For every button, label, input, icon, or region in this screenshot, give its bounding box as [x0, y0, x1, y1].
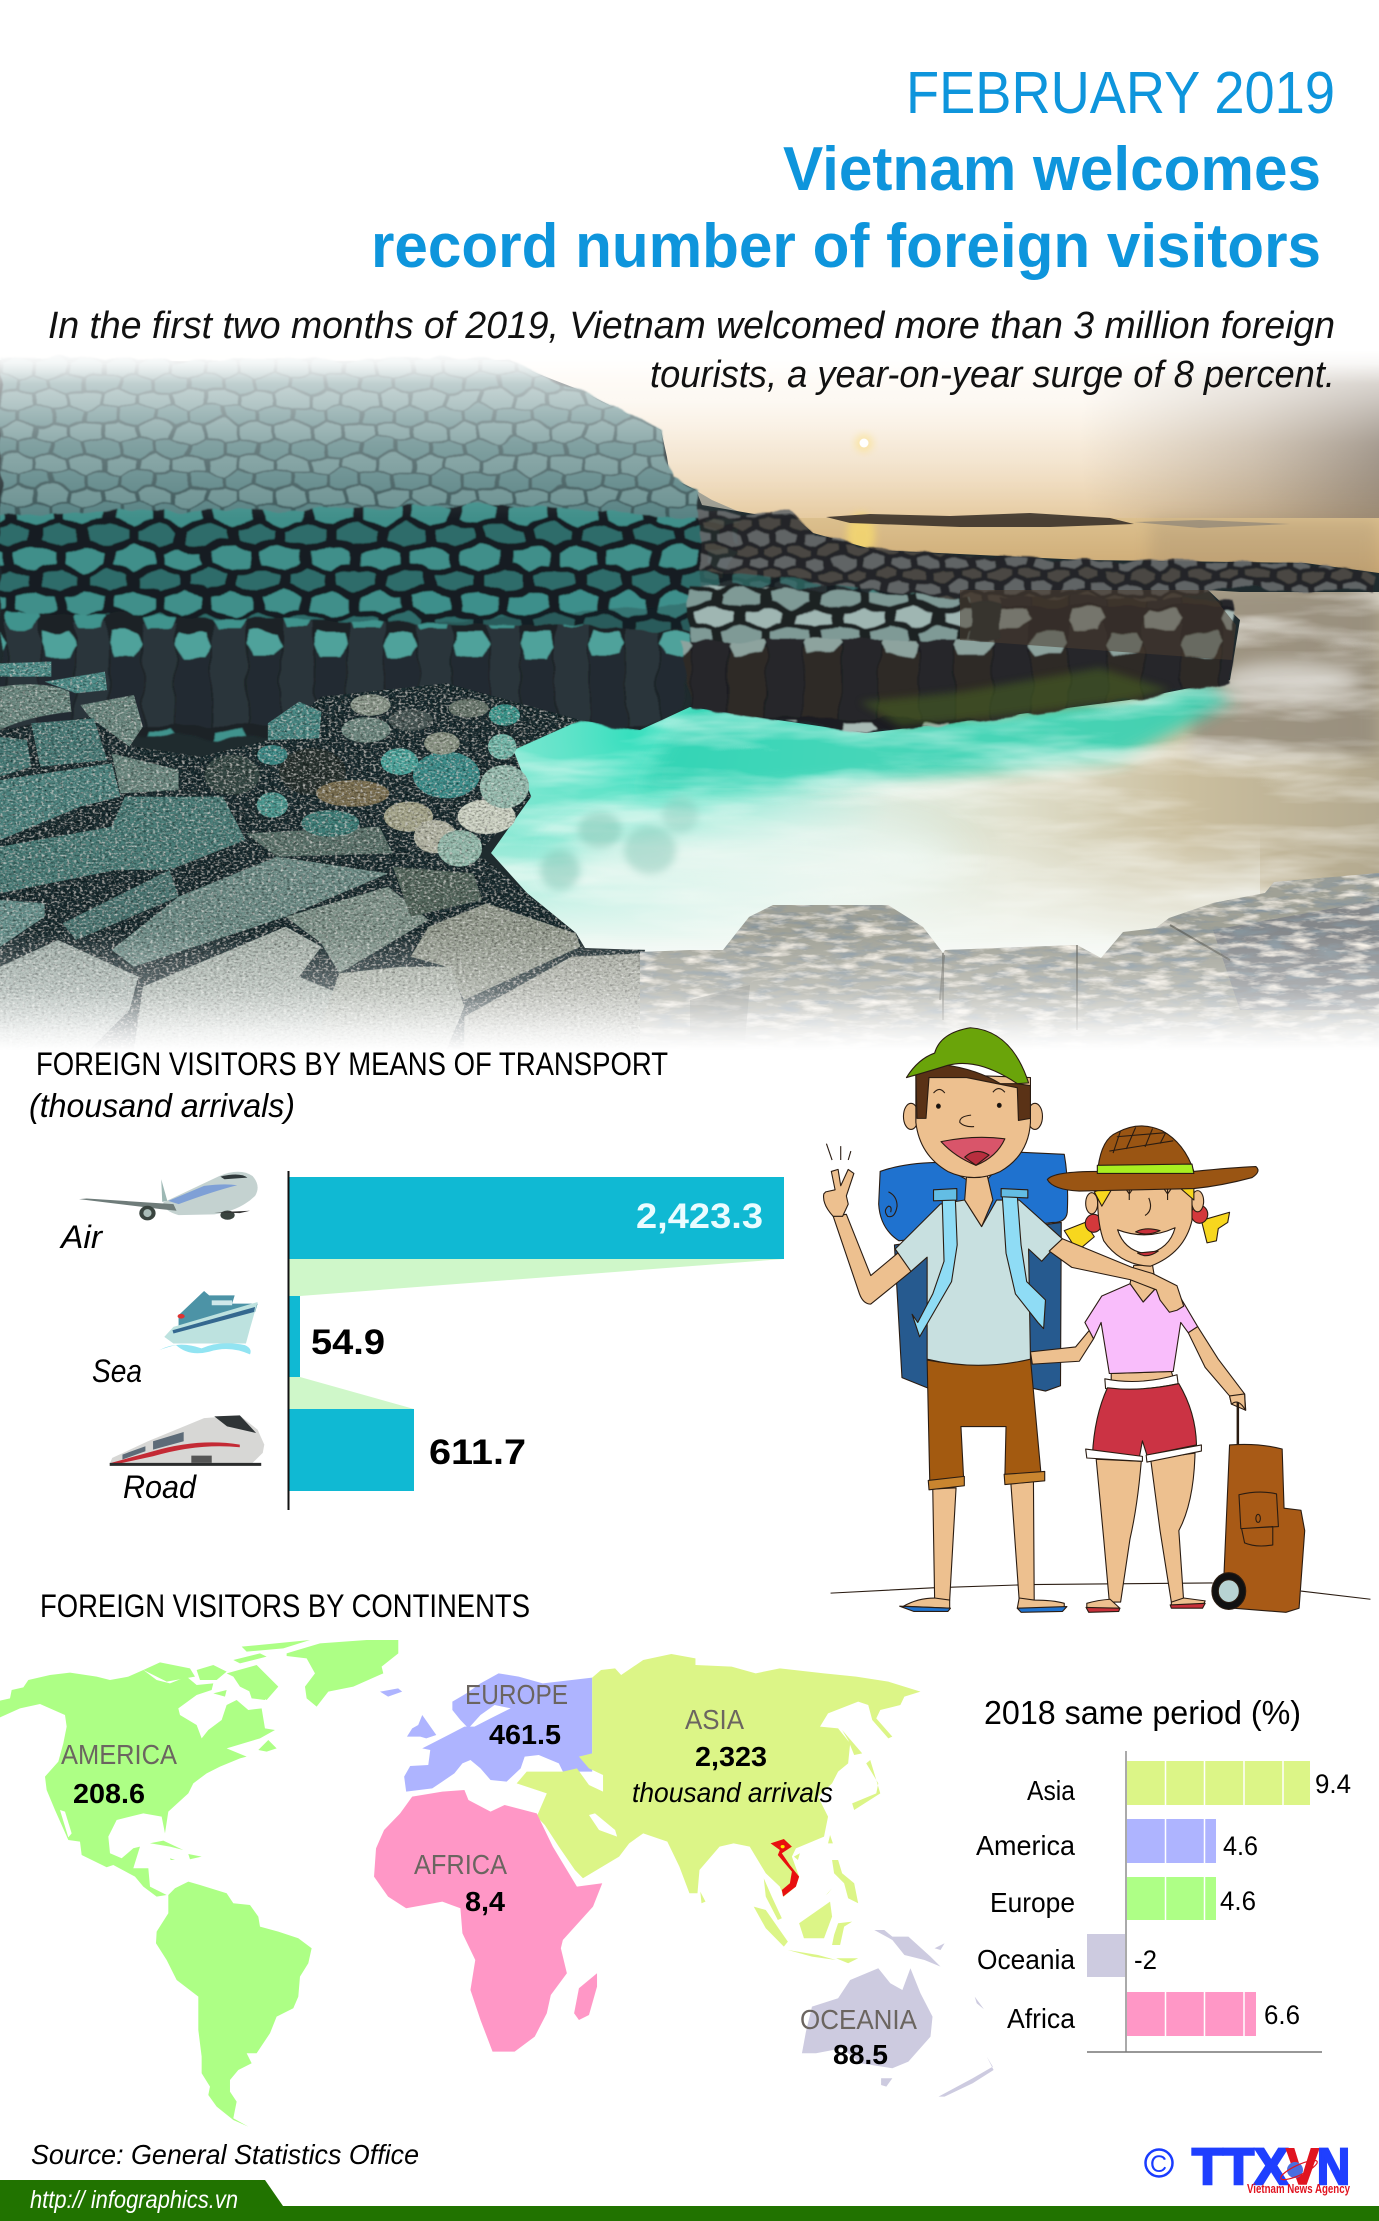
map label: Oceania: 88.5	[833, 2039, 888, 2070]
map label: Africa	[414, 1849, 507, 1917]
bar chart: transport: Sea	[92, 1353, 142, 1389]
map label: Asia: 2,323	[695, 1741, 767, 1772]
source: Source: General Statistics Office	[31, 2139, 419, 2170]
bar chart: 2018 same period: Africa	[1007, 2003, 1075, 2034]
bar chart: transport	[59, 1171, 784, 1510]
bar chart: transport: 54.9	[311, 1323, 385, 1362]
icon: airplane	[79, 1172, 258, 1220]
map label: Africa: 8,4	[465, 1886, 505, 1917]
intro text: In the first two months of 2019, Vietnam welcomed more than 3 million foreign	[48, 305, 1335, 347]
lower-left slabs and boulders	[0, 662, 647, 1050]
map label: Africa: AFRICA	[414, 1849, 507, 1880]
map label: Europe: EUROPE	[465, 1679, 568, 1710]
map: Africa	[374, 1790, 602, 2052]
map label: America	[61, 1739, 177, 1809]
bar chart: transport: 611.7	[429, 1433, 526, 1472]
map label: Europe	[465, 1679, 568, 1750]
heading: transport: FOREIGN VISITORS BY MEANS OF TRANSPORT	[36, 1046, 668, 1082]
bar chart: transport: 2,423.3	[636, 1197, 763, 1236]
map: Eurasia and Africa	[374, 1654, 994, 2097]
map label: Oceania: OCEANIA	[800, 2004, 917, 2035]
bar chart: 2018 same period: 6.6	[1264, 2000, 1300, 2030]
intro text	[48, 305, 1335, 396]
icon: cruise ship	[159, 1291, 258, 1354]
logo: TTXVN: V	[1286, 2138, 1319, 2195]
backpack	[879, 1152, 1068, 1391]
logo: TTXVN	[1146, 2138, 1350, 2196]
bar chart: 2018 same period: 4.6	[1223, 1831, 1258, 1861]
map: Asia	[517, 1654, 920, 1963]
heading: transport	[29, 1046, 668, 1124]
heading: transport: (thousand arrivals)	[29, 1087, 295, 1124]
footer bar	[0, 2180, 1379, 2221]
fades	[0, 930, 1379, 1055]
suitcase	[1212, 1394, 1305, 1612]
intro text: tourists, a year-on-year surge of 8 percent.	[650, 354, 1335, 396]
woman	[1030, 1126, 1258, 1612]
illustration: tourist couple	[824, 1028, 1370, 1612]
ground line	[831, 1583, 1370, 1599]
bar chart: 2018 same period: 4.6	[1220, 1886, 1256, 1916]
map: Europe	[380, 1673, 592, 1792]
logo: TTXVN: C	[1150, 2151, 1167, 2178]
bar chart: 2018 same period: -2	[1134, 1945, 1157, 1975]
map label: Asia: ASIA	[685, 1704, 744, 1735]
map: Vietnam	[771, 1839, 799, 1897]
photo: basalt rocks and turquoise sea	[0, 350, 1379, 1055]
bar chart: 2018 same period	[976, 1751, 1351, 2052]
heading: 2018 same period: 2018 same period (%)	[984, 1694, 1301, 1731]
icon: train	[110, 1415, 264, 1466]
bar chart: 2018 same period: America	[976, 1830, 1075, 1861]
foreground stones across the bay	[640, 873, 1379, 1052]
map: Oceania	[802, 1930, 994, 2097]
bar chart: 2018 same period: Europe	[990, 1887, 1075, 1918]
man	[824, 1028, 1184, 1612]
title: Vietnam welcomes	[783, 135, 1321, 204]
map label: Asia: thousand arrivals	[632, 1777, 833, 1808]
water	[480, 590, 1379, 990]
map label: Asia	[632, 1704, 833, 1808]
map label: America: AMERICA	[61, 1739, 177, 1770]
map label: Europe: 461.5	[489, 1719, 561, 1750]
logo: TTXVN: Vietnam News Agency	[1247, 2182, 1350, 2196]
map: America	[0, 1640, 398, 2127]
map label: Oceania	[800, 2004, 917, 2070]
footer bar: http:// infographics.vn	[30, 2186, 238, 2214]
bar chart: transport: Road	[123, 1469, 197, 1505]
logo: TTXVN: TTX	[1192, 2138, 1288, 2195]
logo: TTXVN: N	[1317, 2138, 1350, 2195]
rock mass	[0, 360, 1379, 1052]
bar chart: 2018 same period: Oceania	[977, 1944, 1075, 1975]
heading: date: FEBRUARY 2019	[906, 60, 1335, 126]
bar chart: 2018 same period: Asia	[1027, 1775, 1075, 1806]
title	[371, 135, 1321, 281]
heading: continents: FOREIGN VISITORS BY CONTINENTS	[40, 1588, 530, 1624]
bar chart: transport: Air	[59, 1219, 103, 1255]
title: record number of foreign visitors	[371, 212, 1321, 281]
map label: America: 208.6	[73, 1778, 145, 1809]
bar chart: 2018 same period: 9.4	[1315, 1769, 1351, 1799]
